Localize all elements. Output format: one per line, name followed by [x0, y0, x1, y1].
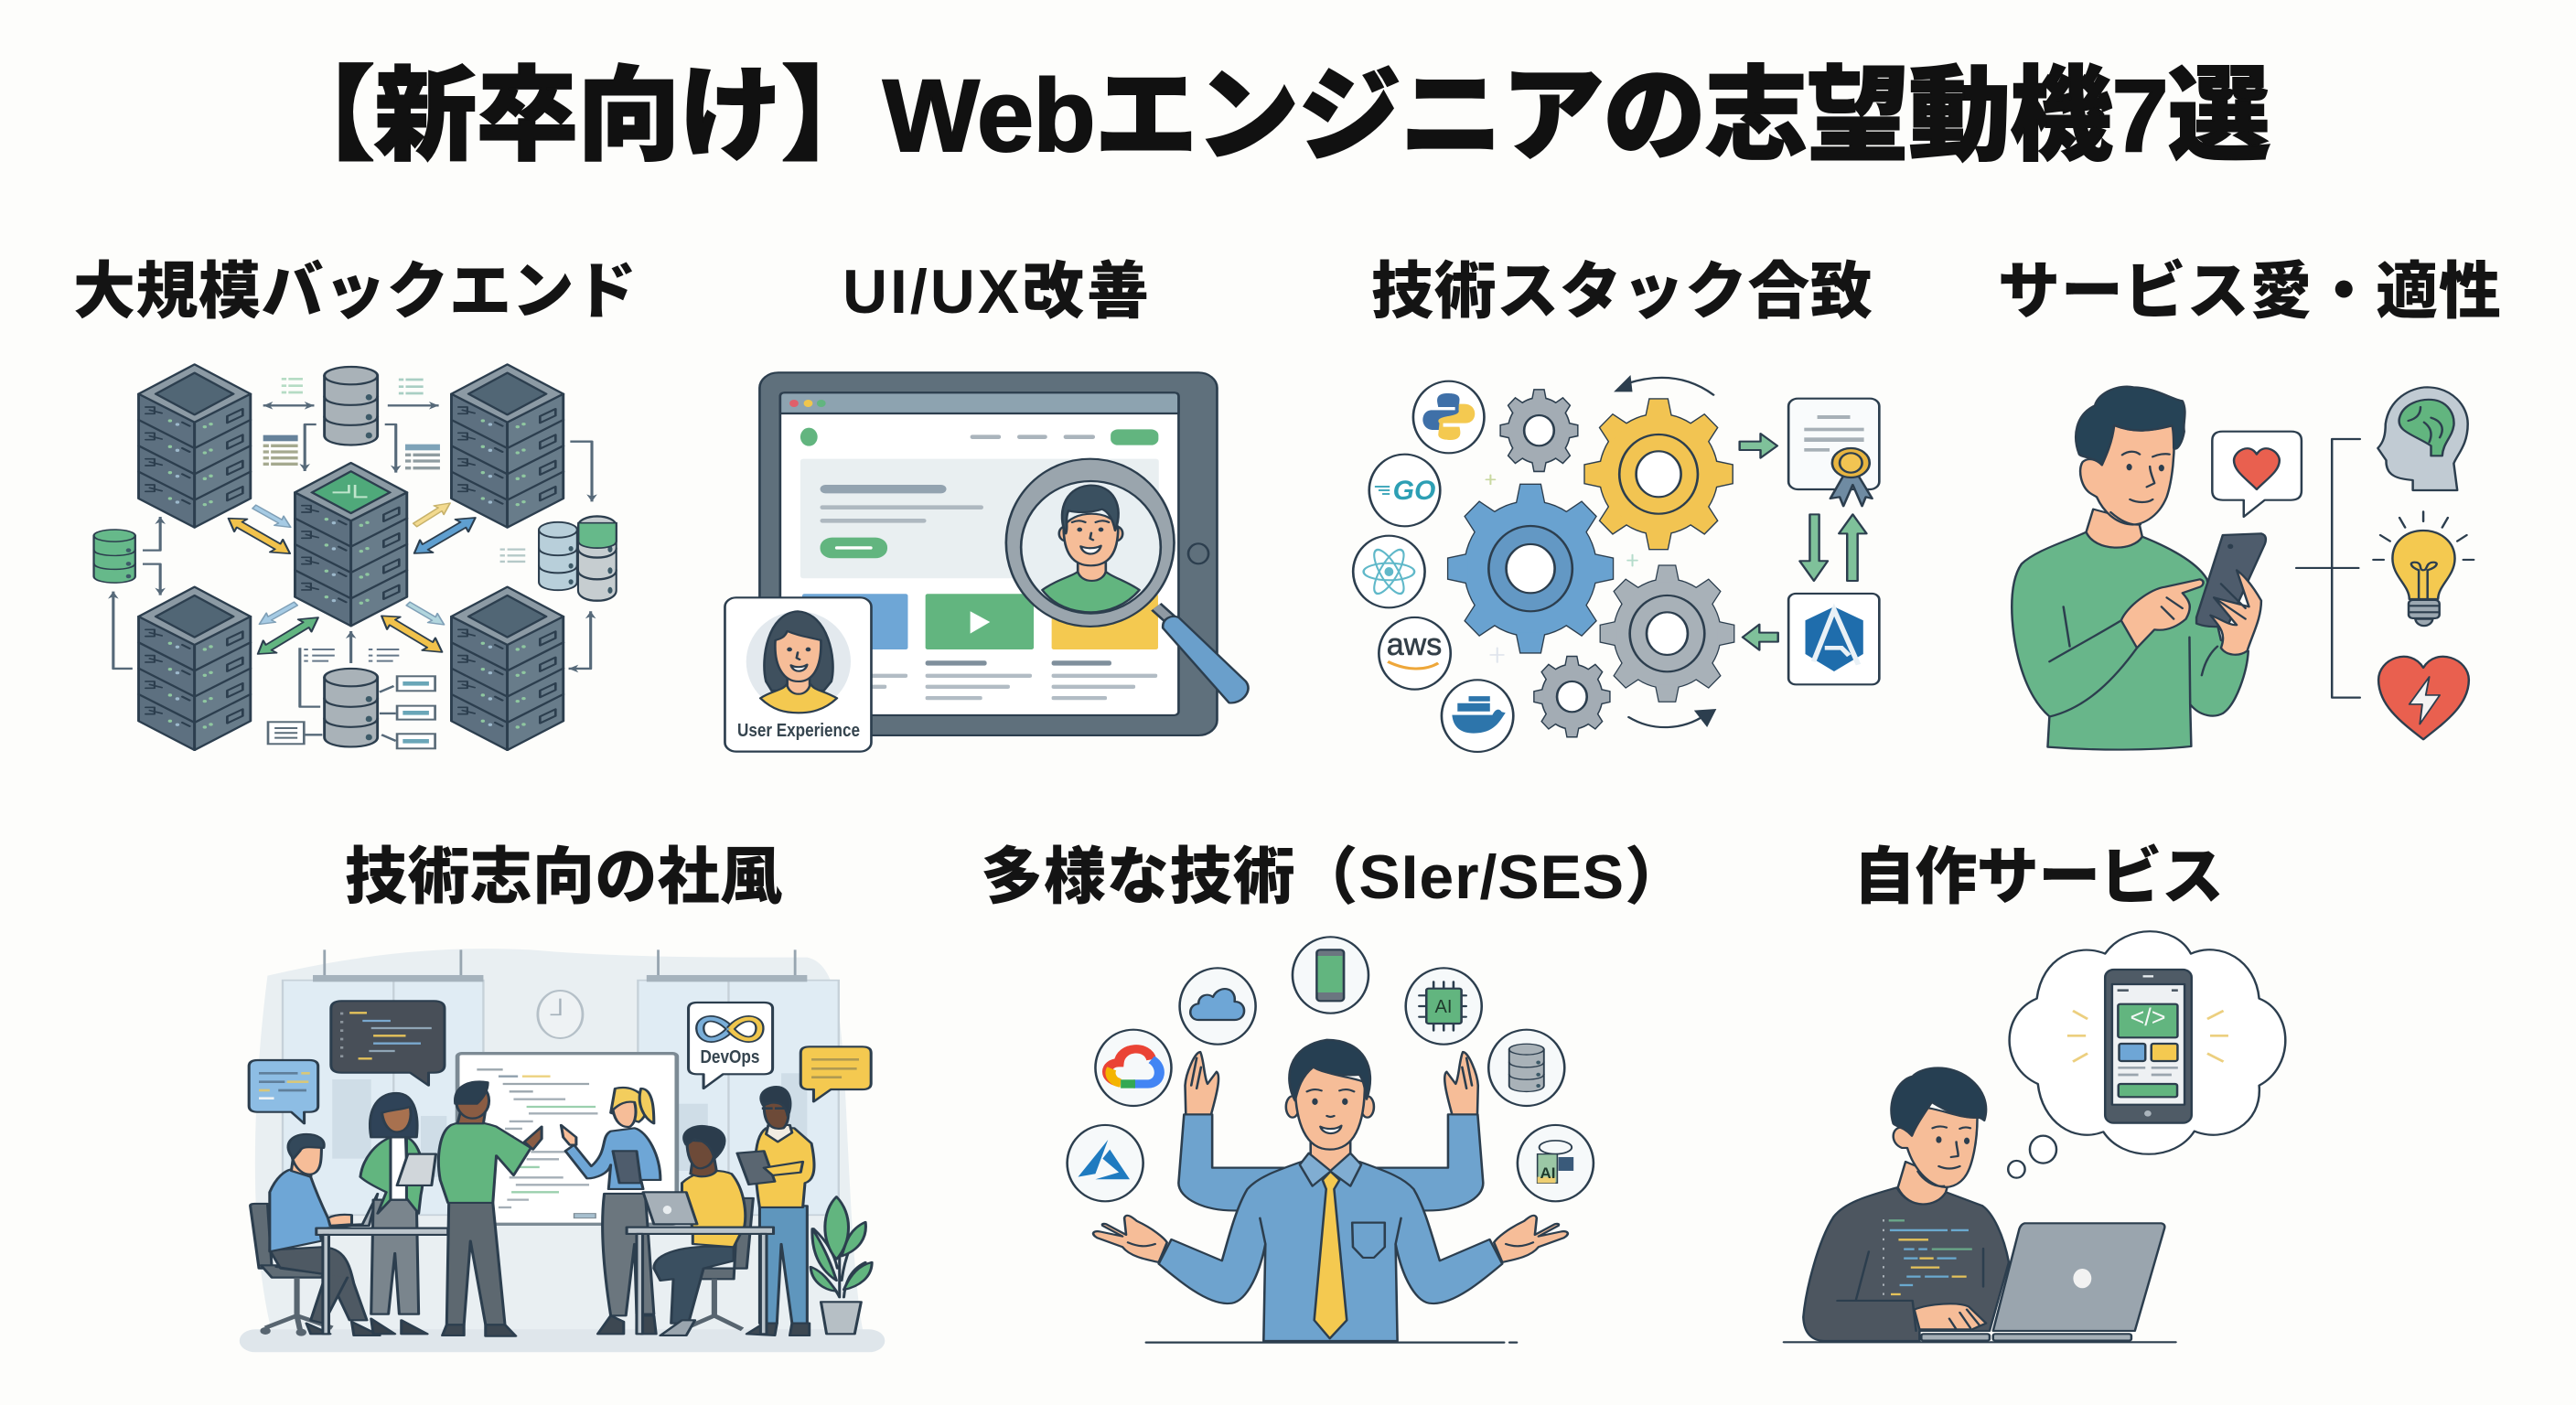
logo text: go: GO — [1393, 476, 1435, 506]
person: man in green from behind — [438, 1081, 542, 1336]
thought bubbles — [2008, 1136, 2056, 1178]
panel: engineering culture — [240, 842, 885, 1352]
tablet frame — [759, 372, 1217, 735]
person: seated in blue — [270, 1134, 380, 1335]
heading: tech stack match: 技術スタック合致 — [1371, 257, 1873, 327]
torso and lower arms — [1159, 1162, 1502, 1341]
icon: head with brain — [2377, 387, 2468, 490]
card label: User Experience: User Experience — [737, 721, 860, 741]
icon circle: AI data — [1518, 1125, 1594, 1201]
icon: database cluster right — [539, 516, 617, 601]
raised hands — [1186, 1052, 1478, 1114]
heading: engineering culture: 技術志向の社風 — [345, 842, 782, 912]
icon text: AI data: AI — [1540, 1164, 1555, 1182]
illustration: gears and tech logos — [1353, 375, 1879, 752]
head — [1286, 1040, 1374, 1150]
title: 【新卒向け】Webエンジニアの志望動機7選 — [273, 59, 2270, 173]
bubble: DevOps — [689, 1003, 773, 1089]
gear: gray large — [1601, 566, 1733, 702]
illustration: tablet with magnifier — [724, 372, 1249, 752]
person: standing with glasses — [737, 1087, 814, 1335]
content cards — [802, 594, 1158, 700]
bubble: dark code — [331, 1001, 445, 1086]
logo text: aws: aws — [1387, 627, 1442, 662]
logo: aws — [1379, 617, 1451, 690]
icon: server stacks — [139, 364, 564, 750]
tool logo tile — [1788, 594, 1879, 684]
logo: react — [1353, 536, 1425, 607]
person: blonde woman — [561, 1088, 660, 1334]
browser bar — [780, 392, 1178, 413]
illustration: multi-armed engineer — [1068, 937, 1594, 1343]
table line — [1146, 1339, 1517, 1346]
desk line — [1784, 1339, 2176, 1346]
nav — [800, 428, 1158, 446]
icon circle: phone — [1293, 937, 1368, 1014]
thick colored arrows — [222, 499, 482, 660]
icon: light bulb — [2373, 511, 2474, 626]
logo: docker — [1442, 680, 1513, 752]
gear: small bottom — [1535, 657, 1609, 736]
lens person — [1042, 486, 1140, 612]
panel: tech stack match — [1353, 257, 1879, 752]
icon circle: cloud — [1180, 968, 1256, 1045]
heading: large scale backend: 大規模バックエンド — [73, 257, 637, 327]
thought cloud — [2010, 931, 2285, 1154]
rotation arrows — [1614, 375, 1716, 727]
person: woman in green jacket — [360, 1093, 436, 1334]
whiteboard with code — [457, 1054, 677, 1224]
icon: database bottom — [325, 669, 378, 746]
person: seated in yellow — [643, 1126, 746, 1335]
radiating lines — [2067, 1011, 2228, 1062]
panel: large scale backend — [73, 257, 637, 750]
logo: python — [1413, 381, 1484, 453]
gear: yellow — [1585, 400, 1733, 549]
upper arms — [1178, 1114, 1483, 1210]
developer — [1803, 1067, 2009, 1341]
code on sweater — [1883, 1220, 1972, 1294]
panel: service love and fit — [1998, 257, 2501, 750]
bracket lines — [2296, 439, 2360, 698]
heading: self-made service: 自作サービス — [1853, 842, 2224, 912]
icon: database top — [325, 367, 378, 445]
heading: UI/UX improvement: UI/UX改善 — [843, 257, 1149, 327]
illustration: server cluster network — [94, 364, 617, 750]
icon circle: google cloud — [1095, 1030, 1171, 1106]
icon: green database — [94, 530, 135, 583]
bubble: blue — [249, 1060, 318, 1123]
illustration: person with phone — [2012, 387, 2474, 750]
desks and chairs behind — [251, 1198, 753, 1336]
web page screen — [780, 392, 1178, 715]
window dots — [789, 400, 826, 407]
tie — [1315, 1172, 1347, 1338]
neck and collar — [1300, 1137, 1361, 1186]
laptop — [1921, 1223, 2164, 1341]
gear: blue — [1448, 485, 1613, 652]
certificate — [1788, 399, 1879, 506]
icon circle: AI chip — [1406, 968, 1482, 1045]
tablet home button — [1188, 543, 1208, 563]
office background — [240, 949, 885, 1352]
panel: self-made service — [1784, 842, 2285, 1342]
panel: UI/UX improvement — [724, 257, 1249, 752]
potted plant — [810, 1196, 872, 1334]
icon circle: database — [1488, 1030, 1564, 1106]
speech bubble with heart — [2212, 432, 2302, 517]
hero block — [800, 459, 1159, 578]
green arrows — [1740, 434, 1866, 650]
logo: go — [1369, 455, 1440, 526]
heading: various technologies: 多様な技術（SIer/SES） — [981, 842, 1687, 912]
tables — [317, 1228, 774, 1334]
flow arrows between servers — [113, 405, 592, 741]
user experience card — [724, 597, 871, 752]
icon: heart with lightning — [2378, 657, 2469, 739]
phone with app — [2105, 970, 2192, 1123]
open lower hands — [1093, 1216, 1568, 1262]
code glyph on phone: </> — [2130, 1003, 2166, 1031]
sparkles — [1487, 475, 1637, 662]
data boxes and small tables — [263, 379, 525, 748]
person — [2012, 387, 2266, 750]
magnifying glass with user — [1006, 459, 1249, 702]
icon circle: azure — [1068, 1125, 1143, 1201]
icon text: AI chip: AI — [1435, 997, 1452, 1017]
panel: various technologies — [981, 842, 1687, 1343]
illustration: developer dreaming of app — [1784, 931, 2285, 1342]
bubble: yellow — [800, 1046, 871, 1101]
bubble label: DevOps: DevOps — [701, 1047, 759, 1067]
heading: service love and fit: サービス愛・適性 — [1998, 257, 2501, 327]
illustration: team at whiteboard — [240, 949, 885, 1352]
gear: small top — [1501, 391, 1577, 471]
